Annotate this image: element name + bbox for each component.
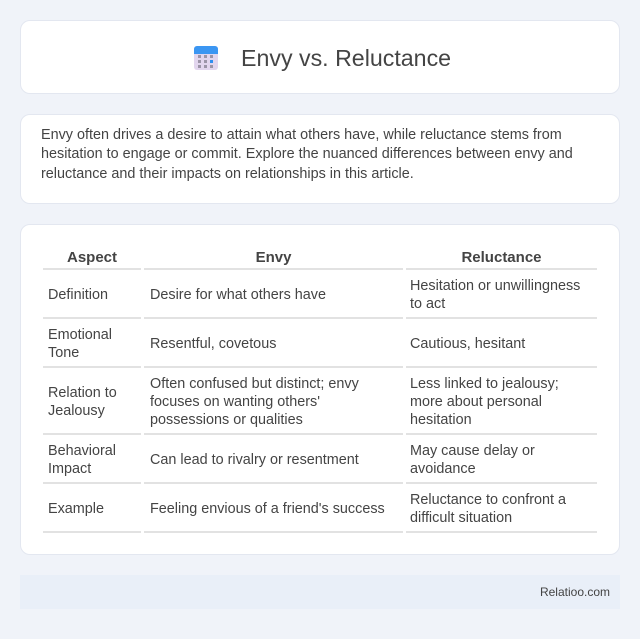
header: Envy: Envy	[256, 249, 291, 266]
row: Example: Feeling envious of a friend's success	[150, 501, 385, 517]
row: Example	[48, 492, 566, 526]
panel: title card	[20, 20, 620, 94]
comparison table	[43, 249, 597, 533]
row: Behavioral Impact: avoidance	[410, 461, 476, 477]
row: Relation to Jealousy: Jealousy	[48, 403, 105, 419]
row: Definition: Desire for what others have	[150, 287, 326, 303]
intro paragraph	[41, 126, 573, 182]
header: Reluctance: Reluctance	[461, 249, 542, 266]
title: Envy vs. Reluctance	[241, 45, 451, 71]
row: Behavioral Impact: Behavioral	[48, 443, 116, 459]
row: Example: Reluctance to confront a	[410, 492, 566, 508]
row: Example: difficult situation	[410, 510, 512, 526]
row: Behavioral Impact: May cause delay or	[410, 443, 535, 459]
row: Example: Example	[48, 501, 104, 517]
row: Relation to Jealousy: hesitation	[410, 412, 472, 428]
row: Definition: to act	[410, 296, 445, 312]
icon: calendar	[194, 46, 218, 70]
row: Relation to Jealousy: possessions or qualities	[150, 412, 303, 428]
row: Emotional Tone: Cautious, hesitant	[410, 336, 525, 352]
row: Relation to Jealousy: focuses on wanting others'	[150, 394, 320, 410]
row: Emotional Tone: Emotional	[48, 327, 112, 343]
row: Relation to Jealousy	[48, 376, 559, 428]
footer credit: Relatioo.com	[540, 585, 610, 599]
row: Relation to Jealousy: Less linked to jealousy;	[410, 376, 559, 392]
row: Emotional Tone	[48, 327, 526, 361]
panel: intro text	[20, 114, 620, 204]
footer bar	[20, 575, 620, 609]
row: Behavioral Impact: Can lead to rivalry or resentment	[150, 452, 359, 468]
header: Aspect: Aspect	[67, 249, 117, 266]
row: Definition	[48, 278, 580, 312]
row: Emotional Tone: Resentful, covetous	[150, 336, 276, 352]
row: Relation to Jealousy: Often confused but distinct; envy	[150, 376, 359, 392]
row: Emotional Tone: Tone	[48, 345, 79, 361]
row: Definition: Hesitation or unwillingness	[410, 278, 580, 294]
row: Behavioral Impact	[48, 443, 535, 477]
intro paragraph: Envy often drives a desire to attain what others have, while reluctance stems from	[41, 126, 562, 142]
panel: comparison table	[20, 224, 620, 555]
intro paragraph: reluctance and their impacts on relationships in this article.	[41, 166, 414, 182]
row: Definition: Definition	[48, 287, 108, 303]
intro paragraph: hesitation to engage or commit. Explore the nuanced differences between envy and	[41, 146, 573, 162]
row: Behavioral Impact: Impact	[48, 461, 91, 477]
row: Relation to Jealousy: more about personal	[410, 394, 542, 410]
row: Relation to Jealousy: Relation to	[48, 385, 117, 401]
